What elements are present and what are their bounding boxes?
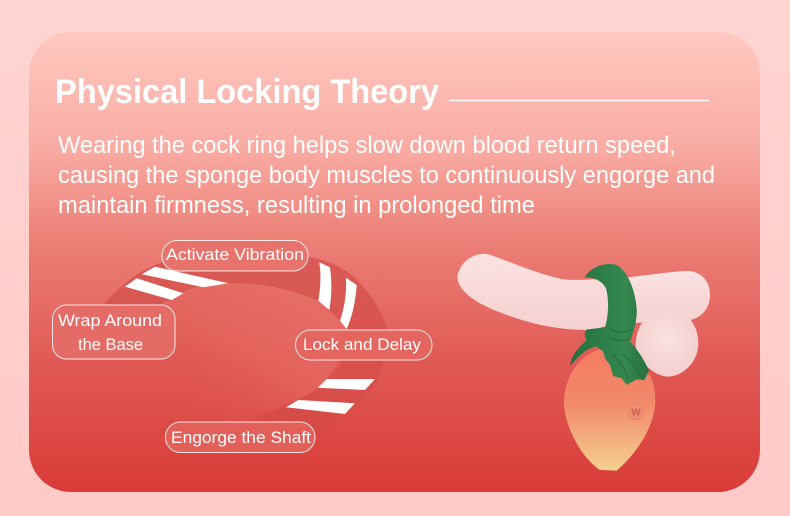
body text xyxy=(58,132,715,219)
body text: causing the sponge body muscles to continuously engorge and xyxy=(58,162,715,189)
diagram: ring cycle xyxy=(52,240,432,452)
label: Lock and Delay xyxy=(296,330,432,360)
label: Activate Vibration: Activate Vibration xyxy=(166,245,304,264)
product illustration xyxy=(457,254,710,471)
body text: maintain firmness, resulting in prolonged time xyxy=(58,192,535,219)
heading: Physical Locking Theory xyxy=(55,73,439,111)
egg vibrator xyxy=(564,348,655,471)
egg vibrator: W xyxy=(631,408,641,419)
label: Wrap Around the Base: the Base xyxy=(78,335,143,354)
label: Wrap Around the Base xyxy=(52,305,175,359)
round body segment xyxy=(636,308,698,377)
label: Wrap Around the Base: Wrap Around xyxy=(58,311,162,330)
ring band xyxy=(105,251,387,437)
body text: Wearing the cock ring helps slow down blood return speed, xyxy=(58,132,676,159)
label: Activate Vibration xyxy=(162,240,308,271)
label: Engorge the Shaft xyxy=(166,422,315,452)
ring inner area xyxy=(162,283,347,422)
label: Engorge the Shaft: Engorge the Shaft xyxy=(171,428,311,447)
front body segment xyxy=(457,254,613,330)
ring stripes xyxy=(125,262,375,414)
rear body segment xyxy=(627,271,710,323)
green ring with leaves xyxy=(571,264,649,385)
label: Lock and Delay: Lock and Delay xyxy=(303,335,421,354)
